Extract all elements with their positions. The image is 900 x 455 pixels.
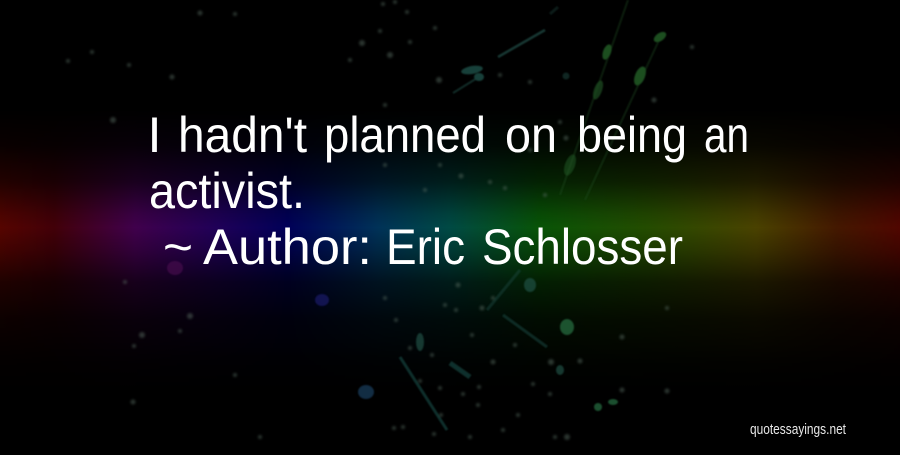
- quote line 1: an: [704, 107, 749, 163]
- paint splatter: teal streaks top: [453, 7, 570, 93]
- watermark: site name: quotessayings.net: [750, 421, 847, 438]
- author attribution: Author:: [203, 219, 372, 275]
- rainbow light band: [0, 141, 900, 340]
- paint splatter: green streaks: [560, 0, 668, 200]
- paint splatter: lower teal and green marks: [167, 261, 618, 430]
- author attribution: Eric: [386, 219, 465, 275]
- quote line 1: on: [505, 107, 557, 163]
- paint splatter: dots: [66, 0, 694, 440]
- quote line 1: I: [148, 107, 162, 163]
- quote line 1: hadn't: [178, 107, 307, 163]
- quote line 1: planned: [324, 107, 486, 163]
- quote text: [148, 107, 749, 219]
- quote line 2: activist.: [149, 163, 305, 219]
- author attribution: ~: [163, 219, 193, 275]
- quote line 1: being: [577, 107, 687, 163]
- author attribution: Schlosser: [482, 219, 683, 275]
